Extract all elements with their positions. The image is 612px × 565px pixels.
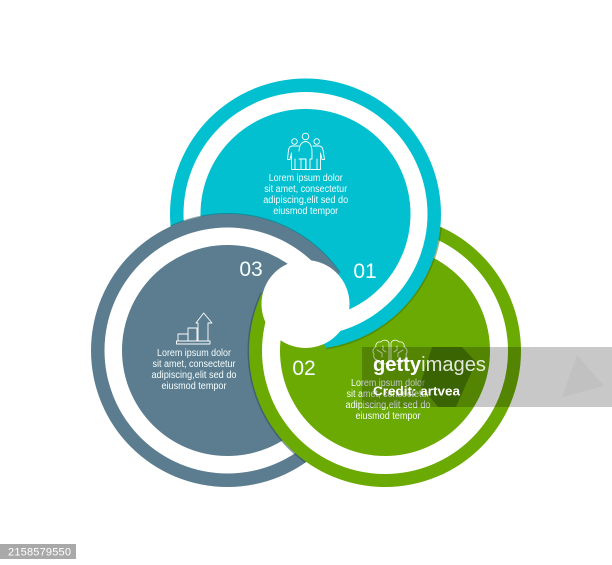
circle segments: lower sector, green over blue [248,292,326,463]
text block: blue panel: Lorem ipsum dolor [157,348,232,359]
text block: green panel: Lorem ipsum dolor [351,378,426,389]
text block: green panel: eiusmod tempor [356,411,421,422]
watermark band [362,347,612,407]
circle segments: right sector, teal over green [324,227,442,406]
text block: teal panel: adipiscing,elit sed do [263,195,349,206]
image id tag [0,544,76,559]
watermark credit text: Credit: artvea [373,384,461,398]
image id tag: 2158579550 [8,546,71,558]
text block: teal panel: Lorem ipsum dolor [269,173,343,184]
text block: blue panel: sit amet, consectetur [152,359,236,370]
text block: green panel: sit amet, consectetur [346,389,430,400]
icon: people [288,133,324,170]
text block: blue panel: eiusmod tempor [162,381,227,392]
circle segments: base layer, blue over teal [126,78,438,294]
text block: teal panel: sit amet, consectetur [264,184,348,195]
icon: brain [373,340,407,364]
text block: blue panel: adipiscing,elit sed do [152,370,237,381]
icon: bar chart with arrow [176,313,212,344]
text block: green panel [346,378,431,422]
central white blob [262,260,350,348]
number 02: 02 [292,357,316,380]
number 01: 01 [353,260,377,283]
text block: teal panel [263,173,349,217]
text block: blue panel [152,348,237,392]
text block: teal panel: eiusmod tempor [273,206,339,217]
watermark logo text: gettyimages [373,354,486,376]
number 03: 03 [239,258,263,281]
text block: green panel: adipiscing,elit sed do [346,400,431,411]
